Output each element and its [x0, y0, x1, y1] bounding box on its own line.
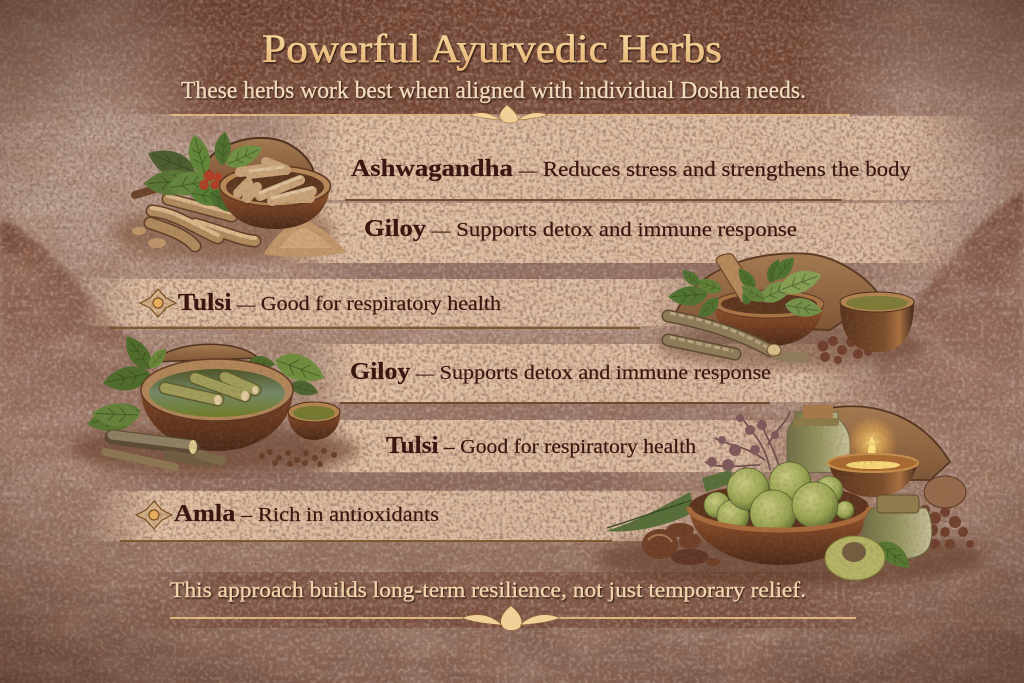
row: Tulsi second: Tulsi – Good for respiratory health: [386, 433, 696, 459]
illustration: amla fruits, jars and lamp: [595, 405, 985, 586]
row: Ashwagandha: Ashwagandha — Reduces stress and strengthens the body: [351, 155, 912, 182]
row: Amla: Amla – Rich in antioxidants: [174, 501, 439, 527]
row: Giloy second: Giloy — Supports detox and immune response: [350, 359, 771, 385]
ornament: top divider: [470, 105, 548, 123]
divider lines between the herb rows: [110, 115, 856, 618]
row: Giloy: Giloy — Supports detox and immune response: [364, 216, 797, 242]
icon: tulsi bullet: [140, 289, 176, 317]
footer statement: This approach builds long-term resilience, not just temporary relief.: [170, 577, 806, 602]
icon: amla bullet: [136, 501, 172, 529]
title: Powerful Ayurvedic Herbs: [262, 26, 722, 71]
row: Tulsi: Tulsi — Good for respiratory health: [178, 290, 501, 316]
illustration: tulsi mortar, pestle and cup: [655, 253, 925, 369]
illustration: ashwagandha roots and bowl: [115, 131, 346, 260]
ornament: bottom divider: [462, 606, 560, 630]
subtitle: These herbs work best when aligned with individual Dosha needs.: [181, 78, 806, 104]
illustration: giloy soaking in bowl: [70, 331, 360, 474]
